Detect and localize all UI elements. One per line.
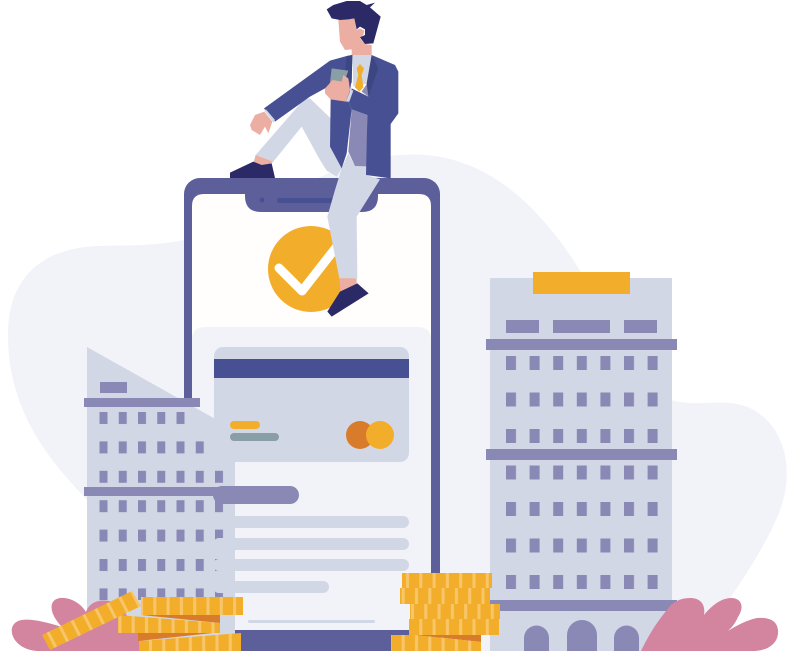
- tie: [355, 64, 364, 92]
- lapel left: [345, 55, 352, 83]
- hair: [327, 1, 381, 44]
- right building: [486, 272, 677, 651]
- shirt: [352, 55, 372, 87]
- shirt cuff right: [346, 89, 353, 102]
- right coin stack: [391, 573, 500, 651]
- right shoe: [327, 283, 369, 317]
- left building: [84, 347, 235, 651]
- vest upper: [362, 82, 368, 97]
- left hand: [250, 112, 272, 135]
- background blob: [8, 155, 787, 651]
- left ankle: [253, 155, 273, 167]
- home indicator: [248, 620, 375, 623]
- left plant: [12, 598, 150, 651]
- businessman: [230, 1, 398, 317]
- jacket shoulder and arm: [264, 55, 352, 122]
- tilted coin: [42, 591, 141, 650]
- phone screen: [192, 194, 431, 630]
- neck and face: [338, 18, 372, 65]
- left shoe: [230, 162, 275, 178]
- lower leg: [327, 153, 380, 278]
- phone notch: [245, 190, 378, 212]
- check badge: [268, 226, 354, 312]
- phone body: [184, 178, 440, 651]
- lapel right: [367, 55, 378, 97]
- left coin stack: [42, 591, 243, 651]
- right ankle: [339, 278, 357, 293]
- jacket: [348, 55, 398, 178]
- credit card: [214, 347, 409, 462]
- phone frame: [184, 178, 440, 651]
- raised leg: [256, 98, 342, 177]
- held phone: [328, 68, 348, 98]
- right hand: [325, 75, 350, 102]
- text placeholder bars: [213, 516, 409, 593]
- screen lower panel: [192, 327, 431, 630]
- shirt cuff left: [264, 109, 275, 122]
- right plant: [641, 598, 778, 651]
- screen heading pill: [213, 486, 299, 504]
- jacket left front: [330, 98, 352, 168]
- vest: [348, 109, 367, 167]
